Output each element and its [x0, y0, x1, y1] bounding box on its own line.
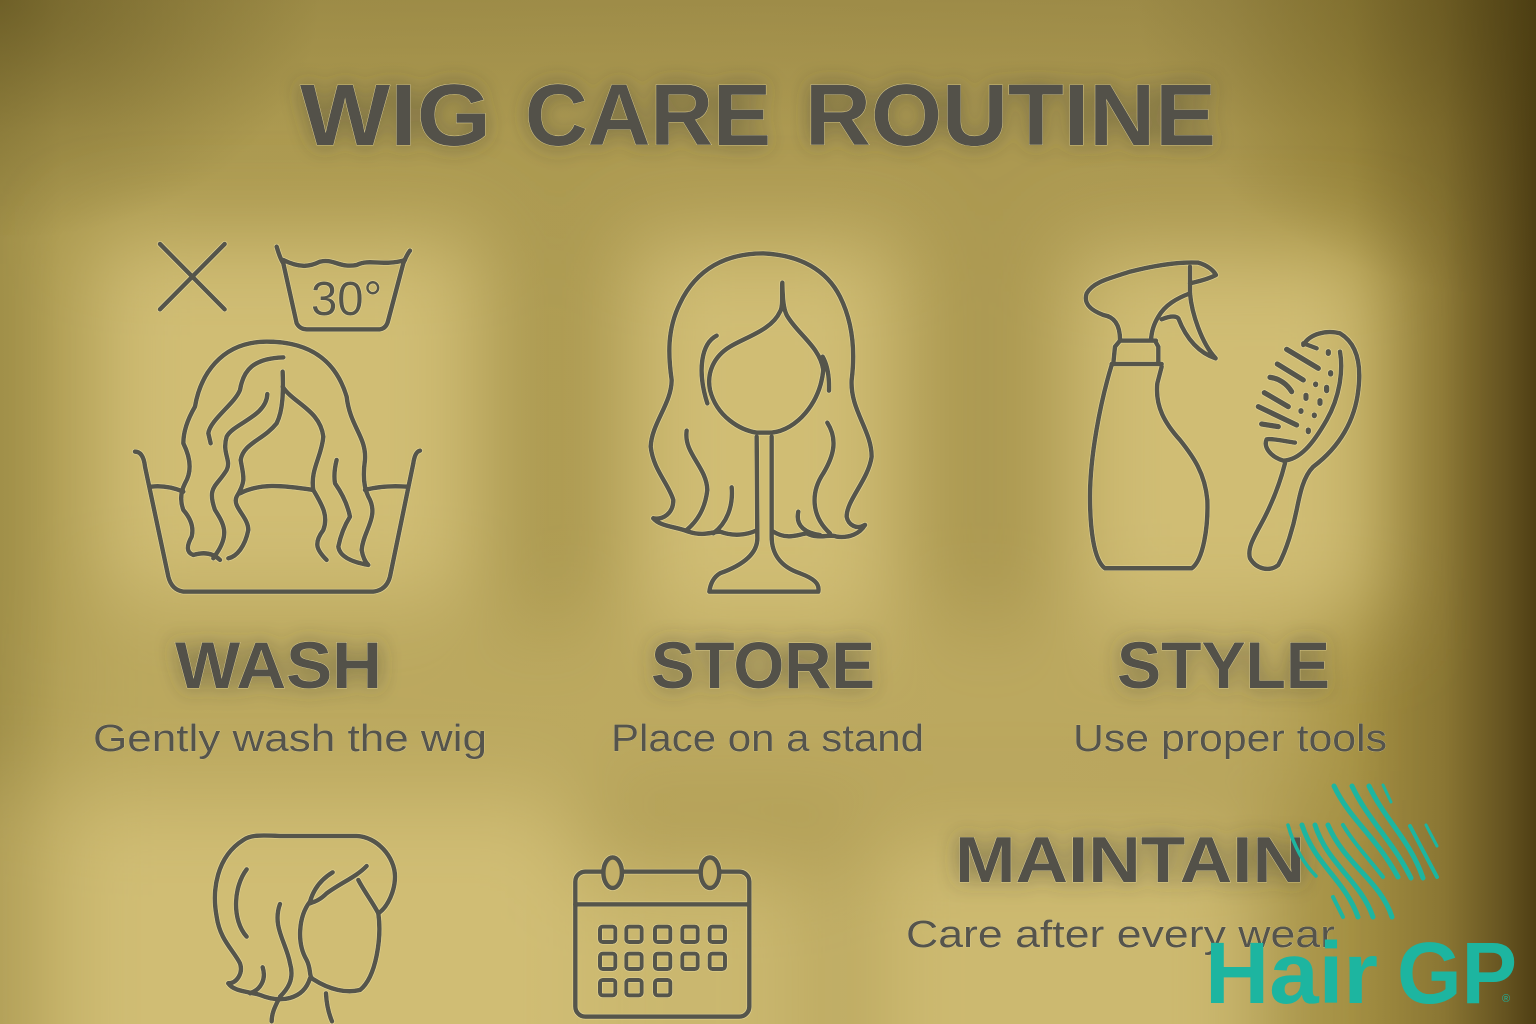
icon: no-wring cross	[160, 244, 225, 309]
heading: maintain: MAINTAIN	[955, 823, 1305, 896]
icon: head with short wig	[215, 835, 395, 1021]
panel: wash	[93, 244, 487, 760]
heading: style: STYLE	[1117, 628, 1330, 702]
caption: style: Use proper tools	[1073, 718, 1387, 760]
icon: spray bottle	[1086, 262, 1216, 568]
title: ROUTINE	[805, 67, 1216, 164]
logo mark: hair strands	[1288, 785, 1437, 917]
logo wordmark GP: GP	[1397, 925, 1517, 1022]
icon: 30 degree wash symbol: 30°	[311, 273, 382, 326]
heading: store: STORE	[651, 628, 875, 702]
title: WIG	[300, 67, 491, 164]
registered mark: ®	[1502, 993, 1510, 1005]
panel: maintain	[906, 823, 1335, 956]
icon: wig in wash basin	[135, 342, 420, 592]
title: CARE	[525, 67, 771, 164]
caption: maintain: Care after every wear	[906, 914, 1335, 956]
caption: store: Place on a stand	[611, 718, 924, 760]
panel: store	[611, 253, 924, 760]
logo wordmark: Hair	[1205, 925, 1378, 1022]
heading: wash: WASH	[175, 628, 382, 702]
icon: calendar	[575, 857, 749, 1017]
icon: 30 degree wash symbol	[277, 247, 410, 329]
icon: wig on stand	[651, 253, 872, 592]
logo: Hair GP	[1205, 785, 1517, 1022]
caption: wash: Gently wash the wig	[93, 718, 487, 760]
panel: style	[1073, 262, 1387, 760]
icon: hair brush	[1249, 332, 1359, 569]
title	[300, 67, 1216, 164]
